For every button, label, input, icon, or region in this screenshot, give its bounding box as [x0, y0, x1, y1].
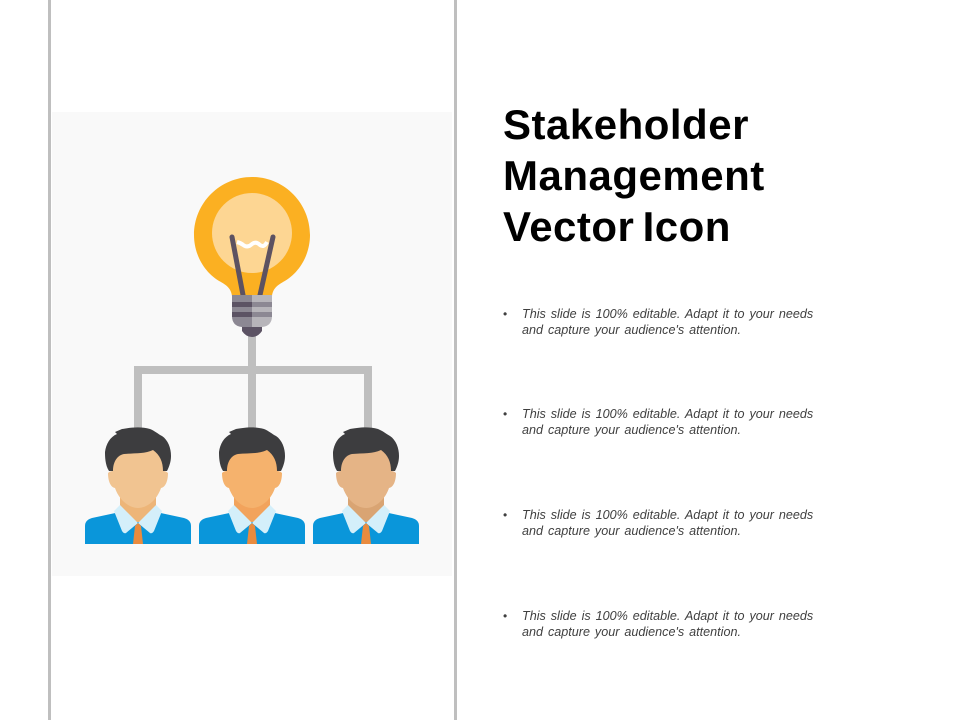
- text block: bullet 2: and capture your audience's attention.: [522, 423, 741, 437]
- connector lines: [134, 330, 372, 436]
- title: Stakeholder: [503, 101, 749, 148]
- text block: bullet 1: and capture your audience's attention.: [522, 323, 741, 337]
- person: middle stakeholder: [199, 427, 305, 544]
- title: Management: [503, 152, 765, 199]
- title: Vector Icon: [503, 203, 731, 250]
- text block: bullet 2: •: [503, 407, 507, 421]
- panel: icon background: [52, 112, 452, 576]
- text block: bullet 4: •: [503, 609, 507, 623]
- text block: bullet 3: •: [503, 508, 507, 522]
- text block: bullet 4: and capture your audience's attention.: [522, 625, 741, 639]
- text block: bullet 1: This slide is 100% editable. Adapt it to your needs: [522, 307, 813, 321]
- text block: bullet 3: [503, 508, 813, 538]
- center vertical rule: [454, 0, 457, 720]
- person: left stakeholder: [85, 427, 191, 544]
- left vertical rule: [48, 0, 51, 720]
- title: [503, 101, 765, 250]
- text block: bullet 3: and capture your audience's attention.: [522, 524, 741, 538]
- icon: light bulb: [194, 177, 310, 337]
- text block: bullet 4: This slide is 100% editable. Adapt it to your needs: [522, 609, 813, 623]
- text block: bullet 1: [503, 307, 813, 337]
- text block: bullet 3: This slide is 100% editable. Adapt it to your needs: [522, 508, 813, 522]
- text block: bullet 2: This slide is 100% editable. Adapt it to your needs: [522, 407, 813, 421]
- text block: bullet 1: •: [503, 307, 507, 321]
- text block: bullet 4: [503, 609, 813, 639]
- person: right stakeholder: [313, 427, 419, 544]
- text block: bullet 2: [503, 407, 813, 437]
